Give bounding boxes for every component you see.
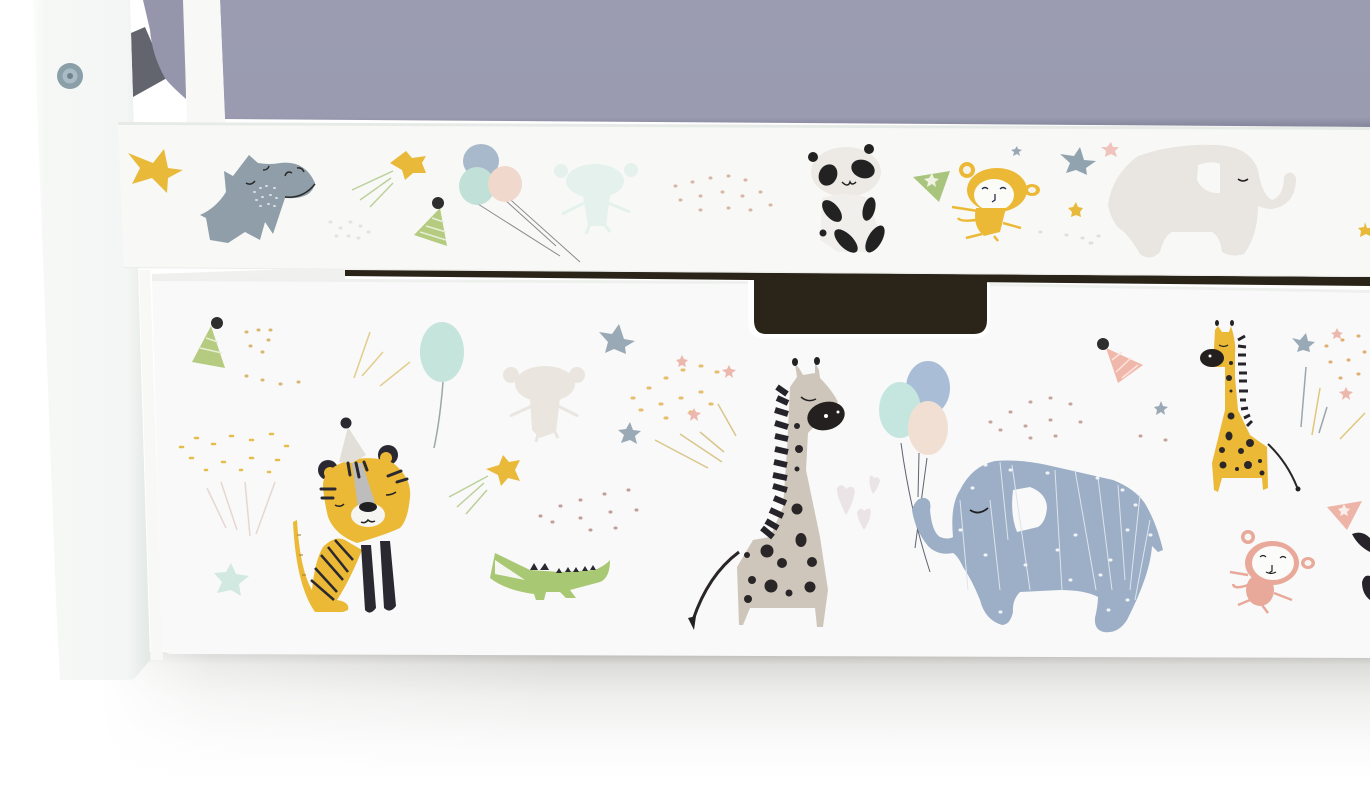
bed post: [33, 0, 163, 680]
icon: blue elephant: [912, 460, 1163, 632]
icon: balloons: [879, 361, 950, 572]
dust dots: [330, 222, 369, 238]
icon: hippo: [200, 155, 315, 243]
icon: small giraffe: [1200, 320, 1300, 492]
drawer shadow gap: [345, 270, 1370, 286]
icon: balloons: [459, 144, 580, 262]
icon: party hat: [414, 197, 447, 246]
icon: edge pennant: [1327, 501, 1362, 530]
icon: panda: [808, 144, 889, 257]
firework stars: [676, 355, 736, 421]
mattress: [131, 0, 1370, 127]
icon: mint star: [214, 563, 249, 596]
confetti dots: [540, 490, 637, 530]
icon: mint monkey: [554, 163, 638, 234]
icon: confetti burst: [180, 434, 288, 472]
slat upright: [183, 0, 225, 122]
confetti dots: [246, 330, 299, 384]
icon: edge panda: [1352, 533, 1370, 600]
icon: party hat: [192, 317, 225, 368]
icon: small grey star: [618, 422, 641, 444]
icon: yellow monkey: [952, 162, 1040, 241]
icon: cream monkey: [503, 366, 585, 442]
floor shadow: [60, 652, 1370, 780]
icon: tiger: [293, 418, 410, 613]
icon: shooting star: [449, 455, 520, 514]
icon: yellow star: [128, 149, 183, 193]
icon: pennant: [913, 171, 950, 202]
icon: edge star: [1358, 222, 1370, 237]
drawer decals: [180, 317, 1370, 632]
icon: small star: [1154, 401, 1168, 415]
icon: giraffe: [688, 357, 848, 630]
icon: grey star: [599, 324, 635, 354]
rail decals: [128, 142, 1370, 262]
icon: top-right stars and fireworks: [1292, 328, 1365, 439]
icon: beige elephant: [1108, 145, 1296, 258]
firework rays: [655, 404, 736, 468]
icon: shooting star: [352, 151, 426, 207]
confetti dots: [990, 398, 1166, 440]
icon: firework lines: [354, 332, 410, 386]
confetti dots: [675, 176, 771, 210]
drawer handle cut-out: [754, 277, 987, 334]
firework dots: [632, 366, 718, 418]
icon: pink party hat: [1097, 338, 1143, 383]
icon: pink monkey: [1230, 530, 1315, 613]
drawer front: [152, 268, 1370, 658]
icon: crocodile: [490, 553, 610, 600]
firework rays: [207, 482, 275, 536]
bed rail: [118, 122, 1370, 277]
icon: hearts: [837, 476, 880, 530]
icon: small stars: [1011, 142, 1119, 243]
icon: mint balloon: [420, 322, 464, 448]
